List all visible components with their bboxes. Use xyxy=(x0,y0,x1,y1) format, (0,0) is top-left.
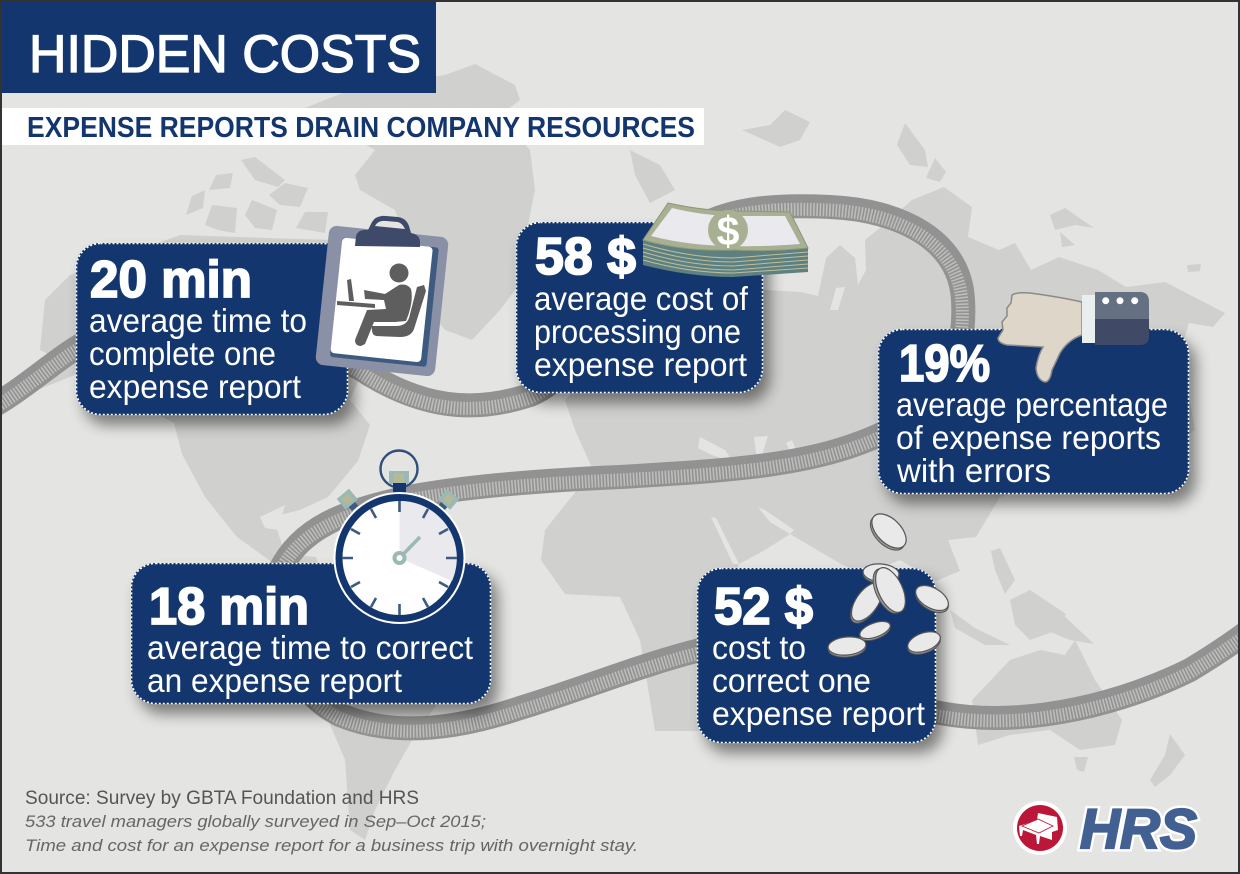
subtitle banner: EXPENSE REPORTS DRAIN COMPANY RESOURCES xyxy=(27,112,695,144)
text: 52 $ description: expense report xyxy=(712,695,925,732)
icon: stack of money xyxy=(643,203,808,277)
icon: thumbs down xyxy=(998,292,1149,382)
text: 58 $ description xyxy=(534,280,749,383)
stat: 52 $: 52 $ xyxy=(714,578,813,636)
text: 19% description xyxy=(896,386,1168,489)
panel: 19% xyxy=(878,329,1189,494)
panel: 58 $ xyxy=(516,222,763,393)
text: 58 $ description: expense report xyxy=(534,346,747,383)
source text: 533 travel managers globally surveyed in Sep–Oct 2015; xyxy=(25,812,486,831)
icon: stopwatch xyxy=(334,450,466,624)
text: 58 $ description: processing one xyxy=(534,313,741,350)
icon: falling coins xyxy=(827,508,953,659)
title banner: HIDDEN COSTS xyxy=(29,25,421,84)
ribbon road xyxy=(0,206,1240,731)
text: 20 min description: average time to xyxy=(89,302,307,339)
text: 52 $ description: correct one xyxy=(712,662,871,699)
stat: 18 min: 18 min xyxy=(149,578,309,636)
source text: Time and cost for an expense report for a business trip with overnight stay. xyxy=(25,836,638,855)
text: 18 min description xyxy=(147,629,473,699)
text: 52 $ description xyxy=(712,629,925,732)
logo: HRS: HRS xyxy=(1080,797,1197,860)
stat: 19%: 19% xyxy=(899,335,990,393)
logo: HRS xyxy=(1013,797,1197,860)
text: 58 $ description: average cost of xyxy=(534,280,749,317)
stat: 58 $: 58 $ xyxy=(535,228,636,286)
text: 18 min description: average time to correct xyxy=(147,629,473,666)
text: 52 $ description: cost to xyxy=(712,629,806,666)
text: 18 min description: an expense report xyxy=(147,662,402,699)
panel: 52 $ xyxy=(697,568,936,743)
source text xyxy=(25,788,638,855)
text: 19% description: with errors xyxy=(896,452,1051,489)
text: 20 min description: complete one xyxy=(89,335,276,372)
panel: 18 min xyxy=(131,563,491,704)
source text: Source: Survey by GBTA Foundation and HRS xyxy=(25,788,419,809)
icon: stack of money: $ xyxy=(717,208,740,254)
text: 20 min description xyxy=(89,302,307,405)
stat: 20 min: 20 min xyxy=(90,251,252,309)
text: 19% description: of expense reports xyxy=(896,419,1161,456)
logo: HRS: HRS xyxy=(1080,797,1197,860)
text: 20 min description: expense report xyxy=(89,368,301,405)
text: 19% description: average percentage xyxy=(896,386,1168,423)
title banner xyxy=(0,0,436,93)
panel: 20 min xyxy=(76,243,348,415)
icon: clipboard with seated person xyxy=(315,216,449,377)
